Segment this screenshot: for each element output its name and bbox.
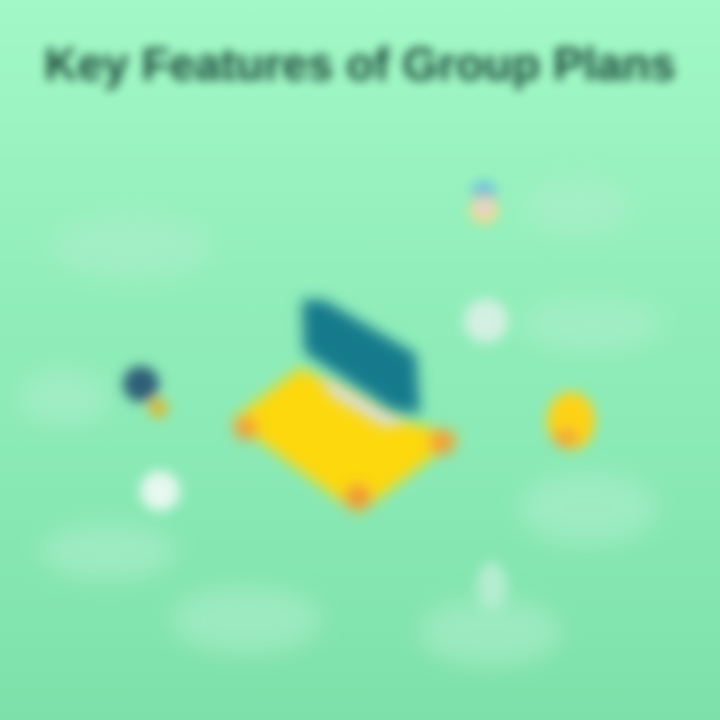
icon: white circle left bbox=[140, 471, 180, 511]
laptop screen bbox=[302, 300, 420, 414]
laptop keyboard highlight bbox=[320, 374, 408, 428]
label: lower right bbox=[520, 472, 656, 544]
label: middle right bbox=[522, 298, 662, 350]
icon: yellow coin bbox=[547, 392, 595, 450]
base corner: bottom bbox=[345, 484, 371, 510]
icon: pale shape bottom bbox=[477, 562, 507, 610]
label: bottom centre bbox=[170, 586, 322, 654]
label: middle left bbox=[18, 370, 110, 426]
laptop base bbox=[232, 368, 460, 514]
laptop illustration bbox=[232, 300, 460, 514]
label: bottom right bbox=[418, 598, 562, 666]
label: lower left bbox=[40, 524, 176, 580]
label: upper left bbox=[52, 214, 212, 278]
label: upper right bbox=[524, 176, 632, 236]
base corner: left bbox=[234, 416, 258, 440]
label clouds bbox=[18, 176, 662, 666]
title: Key Features of Group Plans bbox=[44, 38, 676, 90]
icon: top badge bbox=[470, 181, 498, 224]
icon: dark person bbox=[123, 366, 168, 418]
base corner: right bbox=[429, 429, 455, 455]
icon: white circle right bbox=[464, 299, 508, 343]
